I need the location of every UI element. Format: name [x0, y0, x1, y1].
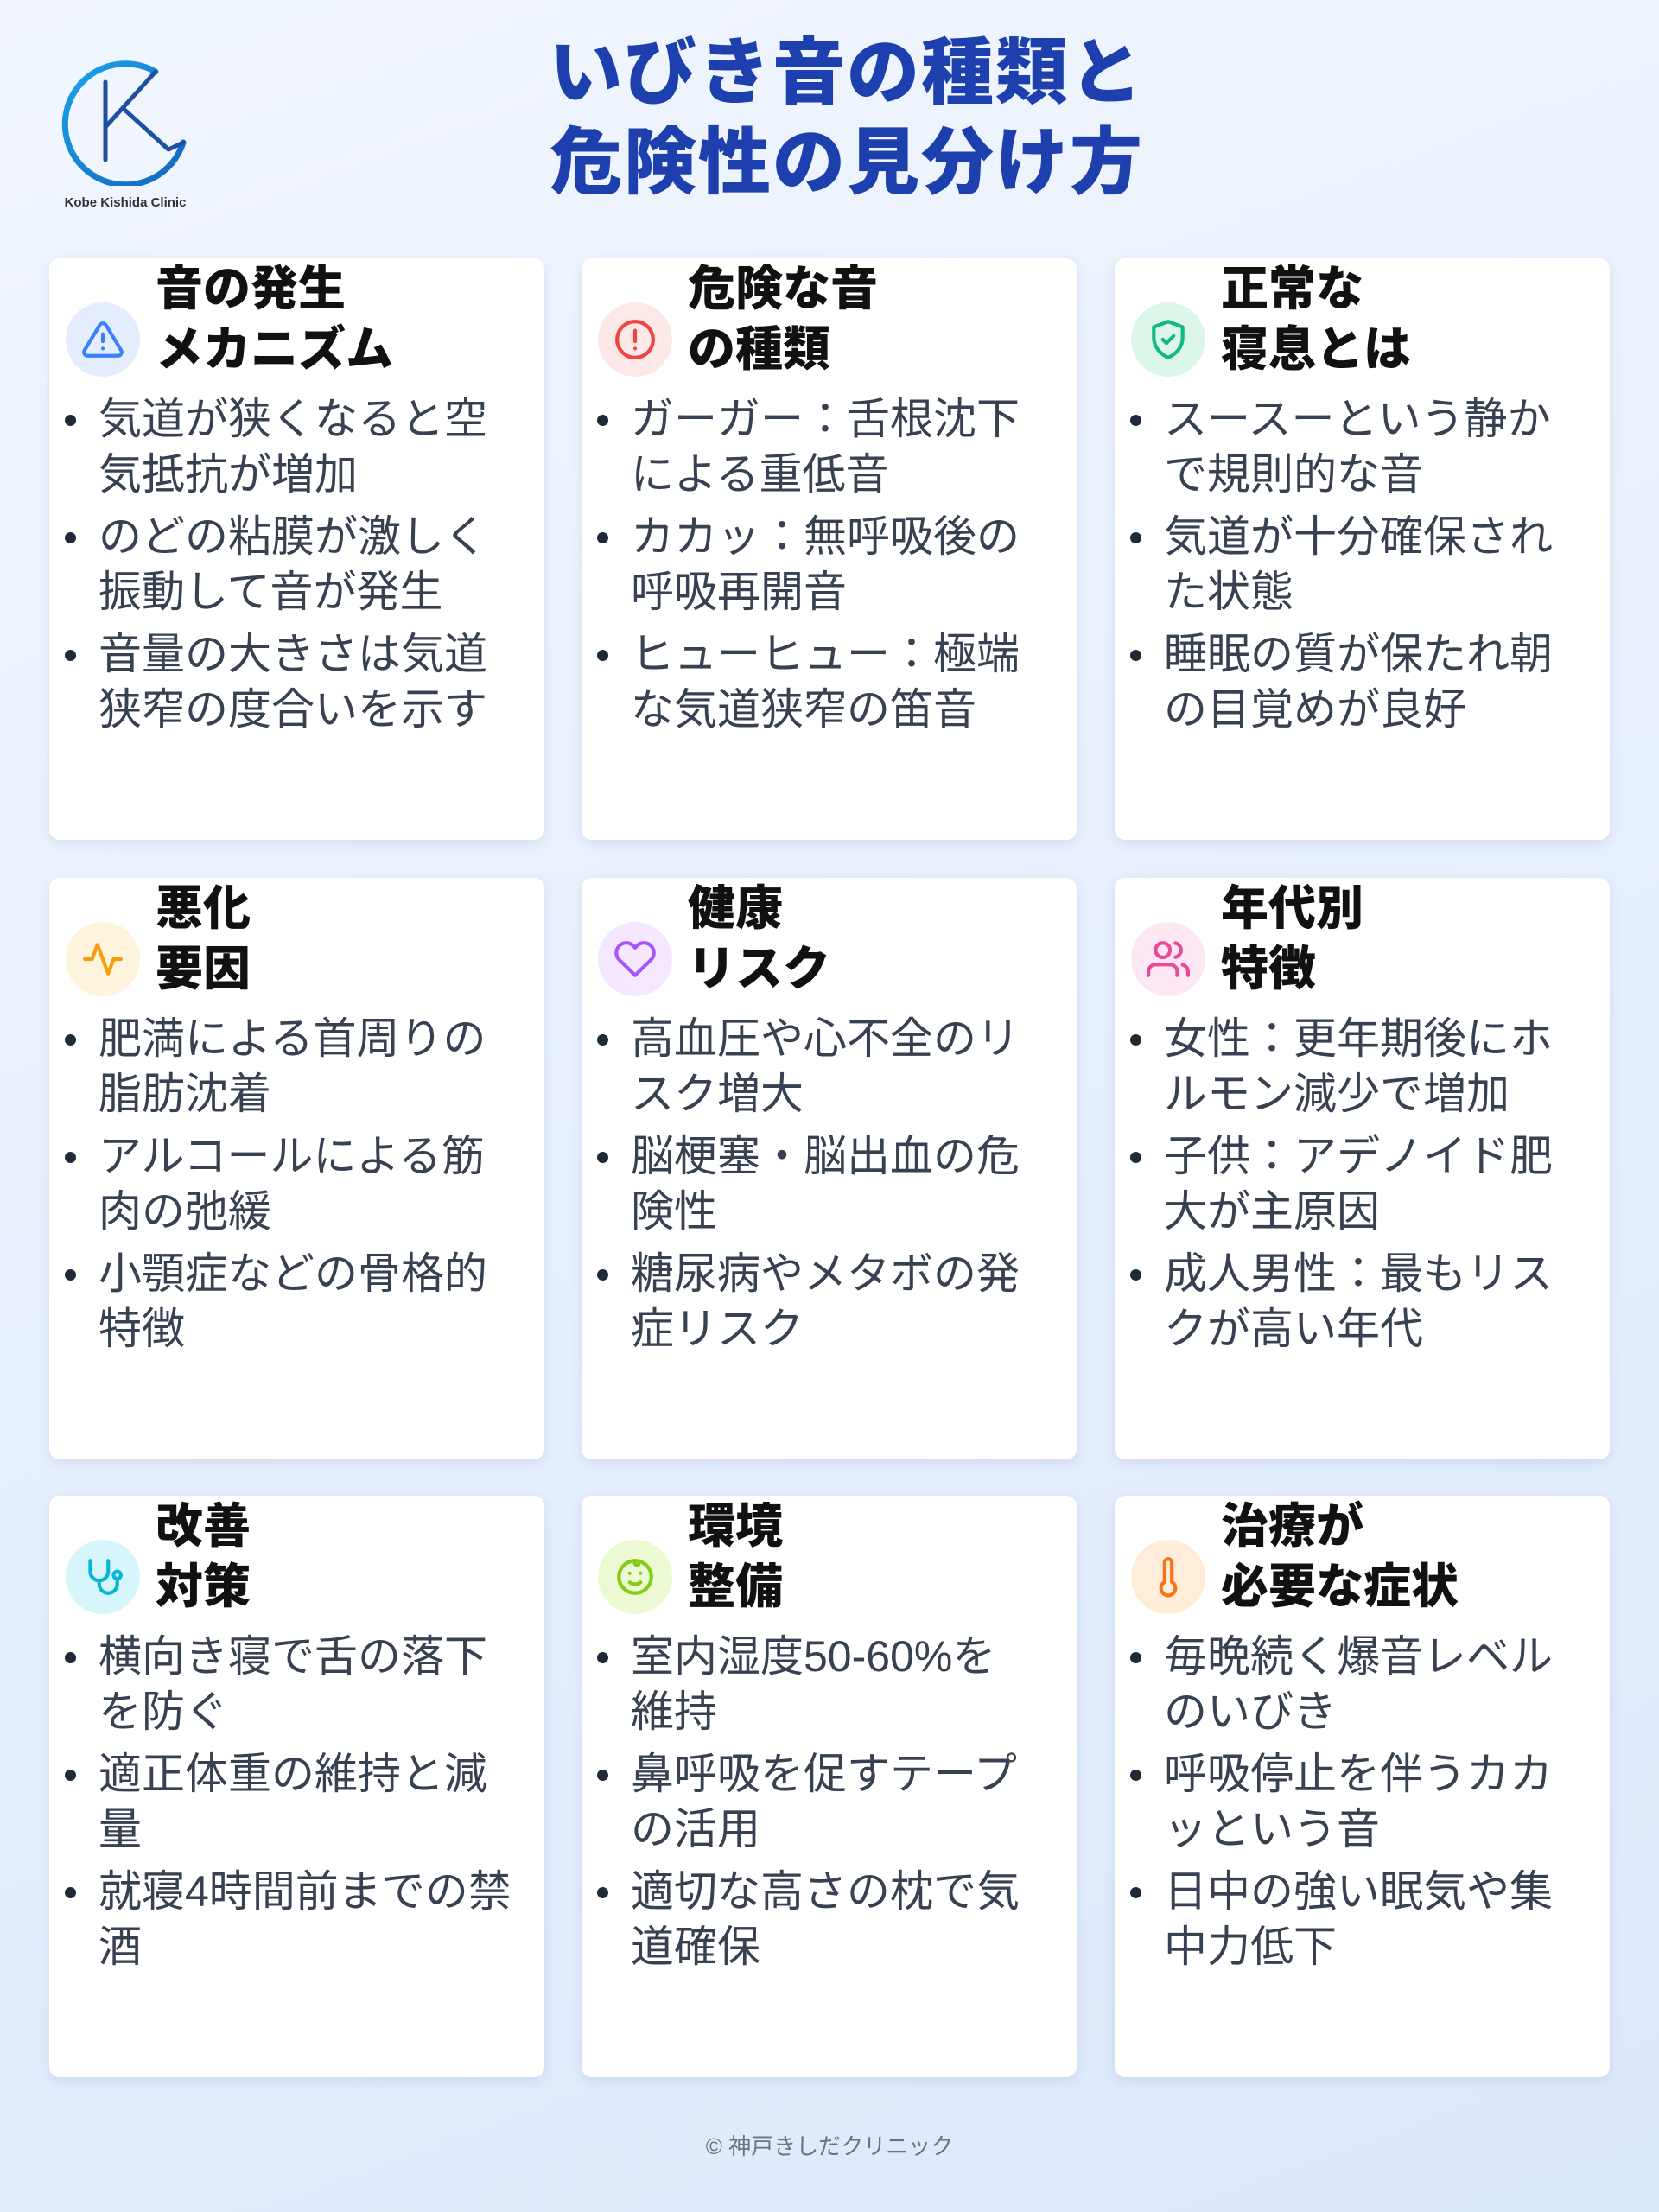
text block: 酒 — [99, 1923, 142, 1971]
heading: 環境 — [688, 1499, 783, 1553]
heading: 治療が — [1221, 1499, 1363, 1553]
heading: 年代別 — [1221, 881, 1363, 935]
logo: Kobe Kishida Clinic — [65, 195, 186, 210]
heading — [688, 262, 878, 376]
icon: activity — [66, 922, 140, 996]
text block: 睡眠の質が保たれ朝 — [1164, 630, 1553, 678]
text block: 適切な高さの枕で気 — [631, 1867, 1020, 1916]
icon: alert — [598, 302, 672, 377]
text block: で規則的な音 — [1164, 450, 1423, 499]
text block: カカッ：無呼吸後の — [631, 512, 1020, 561]
text block: 気抵抗が増加 — [99, 450, 358, 499]
text block: 肥満による首周りの — [99, 1014, 486, 1063]
text block: 就寝4時間前までの禁 — [99, 1867, 512, 1916]
text block — [65, 1632, 512, 1971]
text block: 脳梗塞・脳出血の危 — [631, 1132, 1020, 1180]
heading — [1221, 262, 1411, 376]
text block — [1130, 1014, 1553, 1353]
text block: 気道が十分確保され — [1164, 512, 1553, 561]
heading: 要因 — [156, 942, 251, 995]
text block: 中力低下 — [1164, 1923, 1337, 1971]
text block: スク増大 — [631, 1070, 804, 1118]
text block: 女性：更年期後にホ — [1164, 1014, 1553, 1063]
title: 危険性の見分け方 — [550, 122, 1144, 203]
text block: 肉の弛緩 — [99, 1187, 271, 1236]
text block: ルモン減少で増加 — [1164, 1070, 1510, 1118]
text block: を防ぐ — [99, 1688, 228, 1736]
footer: © 神戸きしだクリニック — [706, 2133, 953, 2159]
text block: た状態 — [1164, 568, 1294, 616]
panel: symptoms requiring treatment — [1115, 1496, 1610, 2077]
icon: thermometer — [1131, 1540, 1205, 1614]
text block: 量 — [99, 1805, 142, 1853]
text block: 特徴 — [99, 1305, 185, 1353]
heading — [1221, 1499, 1459, 1613]
heading: 寝息とは — [1221, 322, 1411, 376]
text block: ッという音 — [1164, 1805, 1380, 1853]
text block — [597, 1014, 1020, 1353]
text block: 適正体重の維持と減 — [99, 1750, 487, 1798]
text block: 狭窄の度合いを示す — [99, 685, 487, 734]
text block: ガーガー：舌根沈下 — [631, 395, 1020, 443]
text block: による重低音 — [631, 450, 888, 499]
text block: のどの粘膜が激しく — [99, 512, 487, 561]
text block: ヒューヒュー：極端 — [631, 630, 1020, 678]
heading: リスク — [688, 942, 830, 995]
icon: shield — [1131, 302, 1205, 377]
text block: 成人男性：最もリス — [1164, 1249, 1553, 1298]
text block: 気道が狭くなると空 — [99, 395, 487, 443]
text block: 音量の大きさは気道 — [99, 630, 487, 678]
text block — [65, 395, 487, 734]
text block: 症リスク — [631, 1305, 804, 1353]
panel: dangerous sounds — [582, 258, 1077, 840]
panel: worsening factors — [49, 878, 544, 1459]
icon: stethoscope — [66, 1540, 140, 1614]
panel: environment — [582, 1496, 1077, 2077]
text block: の活用 — [631, 1805, 760, 1853]
heading — [688, 881, 830, 995]
heading — [1221, 881, 1363, 995]
panel: sound mechanism — [49, 258, 544, 840]
text block: 日中の強い眠気や集 — [1164, 1867, 1553, 1916]
text block: 維持 — [631, 1688, 717, 1736]
heading — [688, 1499, 783, 1613]
text block: スースーという静か — [1164, 395, 1550, 443]
text block: アルコールによる筋 — [99, 1132, 485, 1180]
text block: のいびき — [1164, 1688, 1337, 1736]
icon: heart — [598, 922, 672, 996]
text block — [65, 1014, 487, 1353]
text block: 小顎症などの骨格的 — [99, 1249, 487, 1298]
heading: 整備 — [688, 1560, 783, 1613]
text block: 険性 — [631, 1187, 717, 1236]
icon: warning — [66, 302, 140, 377]
heading — [156, 262, 393, 376]
title — [550, 32, 1144, 203]
title: いびき音の種類と — [550, 32, 1144, 113]
logo — [62, 60, 187, 210]
text block: 室内湿度50-60%を — [631, 1632, 995, 1681]
heading — [156, 1499, 251, 1613]
text block — [1130, 395, 1553, 734]
text block: 道確保 — [631, 1923, 760, 1971]
icon: baby face — [598, 1540, 672, 1614]
heading: 対策 — [156, 1560, 251, 1613]
text block: 毎晩続く爆音レベル — [1164, 1632, 1553, 1681]
text block — [597, 1632, 1020, 1971]
heading: 正常な — [1221, 262, 1363, 315]
text block: 鼻呼吸を促すテープ — [631, 1750, 1017, 1798]
panel: health risks — [582, 878, 1077, 1459]
icon: users — [1131, 922, 1205, 996]
text block: クが高い年代 — [1164, 1305, 1423, 1353]
text block: 呼吸再開音 — [631, 568, 847, 616]
text block: の目覚めが良好 — [1164, 685, 1466, 734]
text block: 振動して音が発生 — [99, 568, 442, 616]
text block: 横向き寝で舌の落下 — [99, 1632, 487, 1681]
text block: 子供：アデノイド肥 — [1164, 1132, 1553, 1180]
text block — [597, 395, 1020, 734]
heading: メカニズム — [156, 322, 393, 376]
text block — [1130, 1632, 1553, 1971]
heading: 必要な症状 — [1221, 1560, 1459, 1613]
heading: 改善 — [156, 1499, 251, 1553]
heading: 悪化 — [156, 881, 251, 935]
heading: 危険な音 — [688, 262, 878, 315]
panel: normal breathing — [1115, 258, 1610, 840]
heading — [156, 881, 251, 995]
heading: 音の発生 — [156, 262, 346, 315]
text block: 大が主原因 — [1164, 1187, 1380, 1236]
text block: 呼吸停止を伴うカカ — [1164, 1750, 1553, 1798]
panel: by age — [1115, 878, 1610, 1459]
heading: 特徴 — [1221, 942, 1316, 995]
text block: な気道狭窄の笛音 — [631, 685, 976, 734]
text block: 脂肪沈着 — [99, 1070, 271, 1118]
heading: 健康 — [688, 881, 783, 935]
text block: 糖尿病やメタボの発 — [631, 1249, 1020, 1298]
heading: の種類 — [688, 322, 830, 376]
panel: improvement measures — [49, 1496, 544, 2077]
text block: 高血圧や心不全のリ — [631, 1014, 1020, 1063]
